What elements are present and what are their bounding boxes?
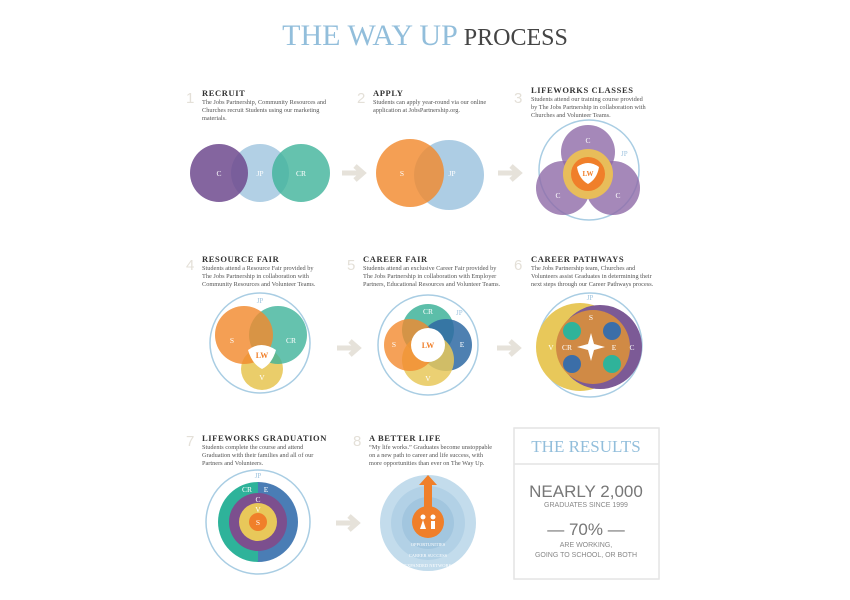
diagram: resource fair <box>210 293 310 393</box>
step 1: recruit: Churches recruit Students using our marketing <box>202 107 320 114</box>
step 1: recruit: The Jobs Partnership, Community Resources and <box>202 99 327 106</box>
step 8: a better life: on a new path to career and life success, with <box>369 452 484 459</box>
step 3: lifeworks classes: 3 <box>514 90 522 107</box>
diagram: graduation rings: CR <box>242 485 252 494</box>
step 6: career pathways: CAREER PATHWAYS <box>531 254 624 264</box>
step 6: career pathways <box>514 254 654 397</box>
diagram: graduation rings: C <box>255 495 261 504</box>
step 8: a better life: “My life works.” Graduates become unstoppable <box>369 444 492 451</box>
step 8: a better life: more opportunities than ever on The Way Up. <box>369 460 485 467</box>
diagram: better life: CAREER SUCCESS <box>409 553 448 558</box>
step 2: apply: application at JobsPartnership.org. <box>373 107 460 114</box>
step 4: resource fair: 4 <box>186 257 194 274</box>
results box: — 70% — <box>547 520 625 539</box>
venn: apply: JP <box>448 169 456 178</box>
diagram: better life: EXPANDED NETWORK <box>404 563 452 568</box>
arrow 1 <box>342 166 363 180</box>
diagram: career pathways: CR <box>562 343 572 352</box>
step 6: career pathways: Volunteers assist Graduates in determining their <box>531 273 653 280</box>
step 2: apply: 2 <box>357 90 365 107</box>
step 7: graduation: 7 <box>186 433 194 450</box>
diagram: better life: OPPORTUNITIES <box>411 542 446 547</box>
venn: recruit: JP <box>256 169 264 178</box>
step 7: graduation: LIFEWORKS GRADUATION <box>202 433 327 443</box>
diagram: classes: C <box>615 191 621 200</box>
diagram: resource fair: CR <box>286 336 296 345</box>
diagram: resource fair: S <box>230 336 234 345</box>
step 5: career fair: The Jobs Partnership in collaboration with Employer <box>363 273 497 280</box>
step 2: apply: Students can apply year-round via our online <box>373 99 486 106</box>
results box: THE RESULTS <box>531 437 641 456</box>
diagram: classes: C <box>585 136 591 145</box>
results box: ARE WORKING, <box>560 542 612 549</box>
step 3: lifeworks classes: by The Jobs Partnership in collaboration with <box>531 104 646 111</box>
step 2: apply <box>357 88 486 210</box>
diagram: career pathways: S <box>589 313 593 322</box>
diagram: career fair: E <box>460 340 465 349</box>
title: THE WAY UP PROCESS <box>282 19 568 52</box>
step 3: lifeworks classes: Students attend our training course provided <box>531 96 644 103</box>
diagram: better life <box>380 475 476 571</box>
step 1: recruit: RECRUIT <box>202 88 245 98</box>
venn: recruit: C <box>216 169 222 178</box>
diagram: graduation rings: E <box>264 485 269 494</box>
step 3: lifeworks classes: LIFEWORKS CLASSES <box>531 85 634 95</box>
diagram: classes: LW <box>582 170 594 178</box>
step 7: graduation: Partners and Volunteers. <box>202 460 264 467</box>
diagram: career pathways: JP <box>587 294 593 302</box>
step 4: resource fair: RESOURCE FAIR <box>202 254 280 264</box>
diagram: career fair: LW <box>422 341 434 350</box>
step 5: career fair: Partners, Educational Resources and Volunteer Teams. <box>363 281 501 288</box>
results box: GRADUATES SINCE 1999 <box>544 502 628 509</box>
diagram: graduation rings: S <box>256 518 260 527</box>
step 1: recruit: 1 <box>186 90 194 107</box>
diagram: resource fair: JP <box>257 297 263 305</box>
diagram: resource fair: LW <box>256 351 268 360</box>
step 7: graduation: Graduation with their families and all of our <box>202 452 314 459</box>
diagram: career pathways <box>536 293 642 397</box>
results box <box>514 428 659 579</box>
step 8: a better life <box>353 433 492 571</box>
diagram: career fair: S <box>392 340 396 349</box>
step 5: career fair: Students attend an exclusive Career Fair provided by <box>363 265 497 272</box>
venn: recruit: CR <box>296 169 306 178</box>
step 2: apply: APPLY <box>373 88 404 98</box>
step 1: recruit <box>186 88 330 202</box>
step 4: resource fair: The Jobs Partnership in collaboration with <box>202 273 310 280</box>
arrow 5 <box>336 516 357 530</box>
step 7: graduation: Students complete the course and attend <box>202 444 304 451</box>
diagram: classes: C <box>555 191 561 200</box>
step 5: career fair: 5 <box>347 257 355 274</box>
diagram: career pathways: E <box>612 343 617 352</box>
diagram: resource fair: V <box>259 373 265 382</box>
diagram: career fair <box>378 295 478 395</box>
step 8: a better life: 8 <box>353 433 361 450</box>
step 5: career fair: CAREER FAIR <box>363 254 428 264</box>
venn: apply: S <box>400 169 404 178</box>
arrow 2 <box>498 166 519 180</box>
step 4: resource fair: Students attend a Resource Fair provided by <box>202 265 314 272</box>
arrow 3 <box>337 341 358 355</box>
step 6: career pathways: 6 <box>514 257 522 274</box>
diagram: career pathways: C <box>629 343 635 352</box>
step 4: resource fair: Community Resources and Volunteer Teams. <box>202 281 316 288</box>
diagram: career fair: V <box>425 374 431 383</box>
diagram: career fair: JP <box>456 309 463 317</box>
diagram: classes: JP <box>621 150 628 158</box>
step 3: lifeworks classes <box>514 85 646 220</box>
step 5: career fair <box>347 254 501 395</box>
diagram: classes <box>536 120 640 220</box>
step 4: resource fair <box>186 254 316 393</box>
venn: apply <box>376 139 484 210</box>
step 8: a better life: A BETTER LIFE <box>369 433 441 443</box>
results box: NEARLY 2,000 <box>529 482 643 501</box>
step 3: lifeworks classes: Churches and Volunteer Teams. <box>531 112 611 119</box>
step 1: recruit: materials. <box>202 115 227 122</box>
diagram: graduation rings: V <box>255 505 261 514</box>
step 7: graduation <box>186 433 327 574</box>
diagram: career pathways: V <box>548 343 554 352</box>
step 6: career pathways: The Jobs Partnership team, Churches and <box>531 265 636 272</box>
arrow 4 <box>497 341 518 355</box>
results box: GOING TO SCHOOL, OR BOTH <box>535 552 637 559</box>
venn: recruit <box>190 144 330 202</box>
diagram: graduation rings <box>206 470 310 574</box>
step 6: career pathways: next steps through our Career Pathways process. <box>531 281 654 288</box>
diagram: career fair: CR <box>423 307 433 316</box>
diagram: graduation rings: JP <box>255 472 261 480</box>
